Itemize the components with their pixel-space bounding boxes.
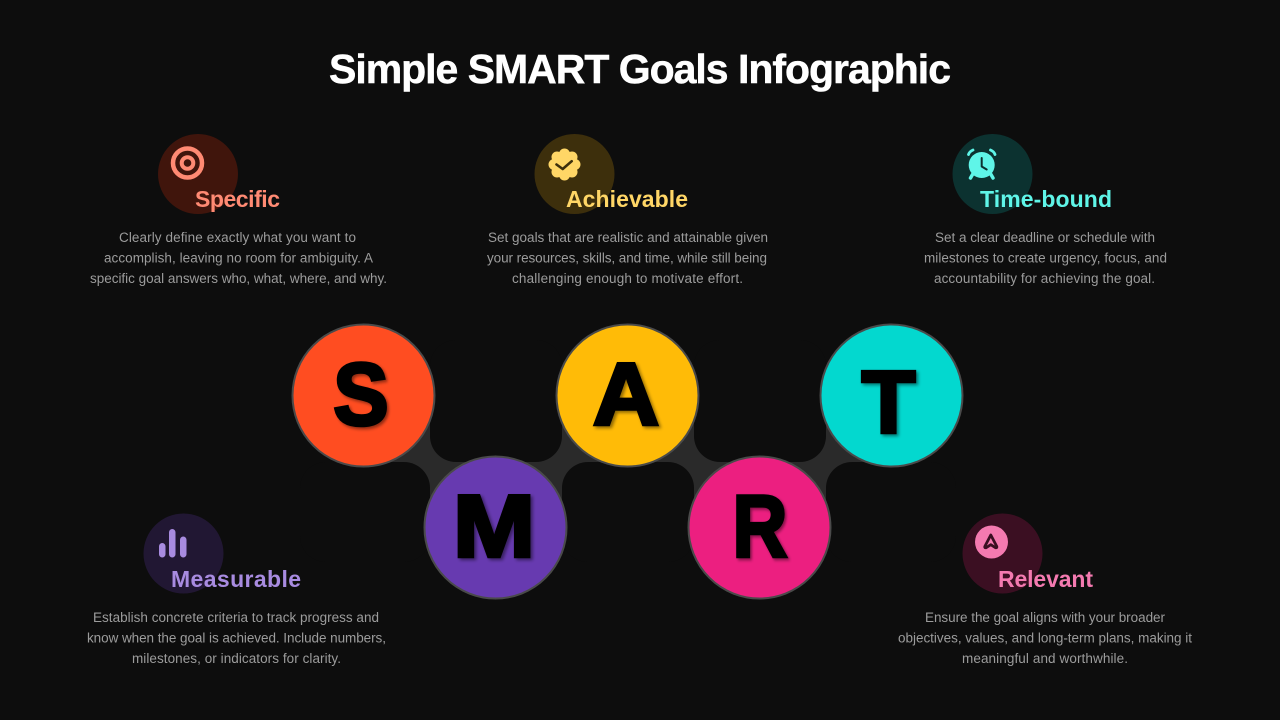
circle: S: S	[333, 346, 389, 444]
panel: Achievable	[487, 134, 768, 286]
text: Time-bound description	[924, 230, 1167, 286]
text: Achievable description	[487, 230, 768, 286]
heading: Measurable: Measurable	[171, 566, 301, 592]
text: Relevant description: meaningful and worthwhile.	[962, 651, 1128, 666]
connector band	[300, 340, 956, 562]
circle: S	[292, 324, 434, 466]
text: Achievable description: your resources, skills, and time, while still being	[487, 250, 767, 266]
circle: A: A	[593, 346, 659, 444]
text: Time-bound description: milestones to create urgency, focus, and	[924, 250, 1167, 266]
icon: check badge	[548, 148, 580, 180]
text: Specific description: accomplish, leaving no room for ambiguity. A	[104, 250, 373, 266]
circle: R: R	[733, 478, 787, 576]
text: Achievable description: challenging enough to motivate effort.	[512, 271, 743, 286]
panel: Measurable	[87, 514, 386, 666]
text: Measurable description: milestones, or indicators for clarity.	[132, 651, 341, 666]
text: Measurable description	[87, 610, 386, 666]
panel: Relevant	[898, 514, 1192, 666]
icon: alarm clock	[968, 150, 995, 178]
text: Time-bound description: accountability for achieving the goal.	[934, 271, 1155, 286]
circle: A	[556, 324, 698, 466]
text: Measurable description: know when the goal is achieved. Include numbers,	[87, 630, 386, 646]
circle: T	[820, 324, 962, 466]
text: Relevant description: Ensure the goal aligns with your broader	[925, 610, 1166, 625]
icon: target	[173, 148, 202, 178]
title: Simple SMART Goals Infographic	[329, 46, 951, 92]
panel: Time-bound	[924, 134, 1167, 286]
circle: M: M	[453, 476, 535, 575]
text: Relevant description: objectives, values, and long-term plans, making it	[898, 630, 1192, 646]
text: Relevant description	[898, 610, 1192, 666]
circle: T: T	[862, 352, 915, 452]
text: Achievable description: Set goals that are realistic and attainable given	[488, 230, 768, 245]
heading: Time-bound: Time-bound	[980, 186, 1112, 212]
icon: relevance badge	[975, 526, 1008, 558]
text: Specific description: specific goal answers who, what, where, and why.	[90, 271, 387, 286]
icon: bars	[159, 529, 186, 558]
panel: Specific	[90, 134, 387, 286]
circle: R	[688, 456, 830, 598]
heading: Relevant: Relevant	[998, 566, 1093, 592]
text: Measurable description: Establish concrete criteria to track progress and	[93, 610, 379, 625]
heading: Specific: Specific	[195, 186, 280, 212]
text: Specific description	[90, 230, 387, 286]
text: Specific description: Clearly define exactly what you want to	[119, 230, 356, 245]
text: Time-bound description: Set a clear deadline or schedule with	[935, 230, 1155, 245]
circle: M	[424, 456, 566, 598]
heading: Achievable: Achievable	[566, 186, 688, 212]
